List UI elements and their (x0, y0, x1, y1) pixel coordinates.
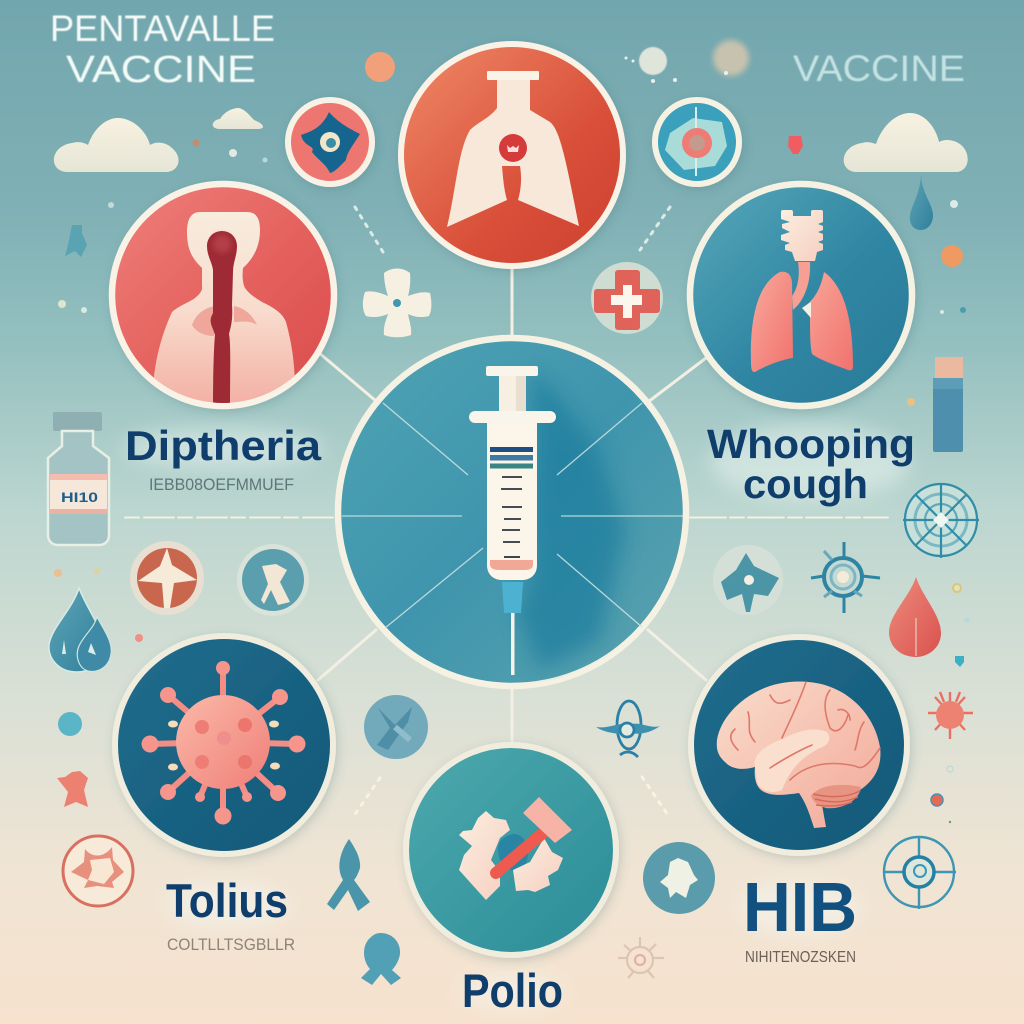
icon: small dots right (931, 766, 953, 823)
icon: teal ribbon badge (237, 544, 309, 616)
icon: syringe (469, 366, 556, 675)
icon: vial right (933, 357, 963, 452)
cloud right (844, 113, 968, 172)
icon: virus (142, 661, 306, 824)
icon: orange star badge (130, 541, 204, 615)
label: Diptheria: IEBB08OEFMMUEF (149, 475, 294, 494)
icon: red sun (928, 692, 973, 739)
panel: small red badge (288, 100, 372, 184)
icon: red cross badge (591, 262, 663, 334)
label halos (123, 424, 910, 1010)
panel: centre vaccine (338, 338, 686, 686)
icon: medical plus cream (363, 268, 431, 337)
dotted trails (353, 207, 670, 818)
panel: whooping cough (690, 184, 912, 406)
panel: tetanus (115, 636, 333, 854)
icon: orange ball (365, 52, 395, 82)
icon: trachea and lungs (751, 210, 853, 372)
label: Tolius (166, 874, 295, 954)
icon: lung flask (447, 71, 579, 227)
label: Polio: Polio (462, 964, 563, 1017)
icon: pale sun (618, 937, 664, 978)
panel: hib (691, 637, 907, 853)
title right: VACCINE (793, 48, 965, 89)
panel: small blue badge (655, 100, 739, 184)
title left: PENTAVALLE (50, 8, 275, 49)
icon: teal ribbon small (361, 933, 401, 985)
title left (50, 8, 275, 91)
label: Whooping cough: cough (743, 461, 868, 507)
icon: target wheel (883, 836, 956, 909)
icon: broken limb (459, 797, 572, 900)
label: Tolius: Tolius (166, 874, 288, 927)
cloud small (213, 108, 263, 129)
cloud left (54, 118, 179, 172)
icon: teal disc with star (643, 842, 715, 914)
icon: red ring badge (63, 836, 133, 906)
icon: orange flower (941, 245, 963, 267)
label: Diptheria (125, 422, 322, 494)
label: Diptheria: Diptheria (125, 422, 322, 469)
icon: red tag (788, 136, 803, 154)
icon: small scattered marks (54, 140, 970, 667)
icon: brain (717, 682, 880, 828)
icon: teal ribbon (327, 839, 370, 911)
icon: blue crossed badge (364, 695, 428, 759)
panel: top lungs (401, 44, 623, 266)
connector lines (125, 268, 888, 748)
label: Tolius: COLTLLTSGBLLR (167, 935, 295, 954)
icon: vial left (48, 412, 109, 545)
icon: vial left: HI10 (61, 489, 98, 505)
icon: radial germ (811, 542, 880, 613)
label: Whooping cough (707, 421, 915, 507)
panel: diphtheria (112, 184, 334, 410)
icon: flying emblem (596, 701, 660, 757)
spokes (342, 403, 683, 628)
icon: red drop (889, 577, 941, 657)
label: Whooping cough: Whooping (707, 421, 915, 467)
icon: throat (152, 212, 296, 410)
icon: red star (57, 771, 88, 807)
icon: double drop (49, 588, 111, 672)
label: HIB: HIB (743, 868, 857, 946)
icon: water drop under cloud (910, 175, 933, 230)
icon: faint spheres top right (624, 40, 749, 83)
panel: polio (406, 745, 616, 955)
label: HIB: NIHITENOZSKEN (745, 949, 856, 966)
icon: teal blob (58, 712, 82, 736)
icon: spider web target (903, 484, 979, 558)
icon: germ in pale badge (713, 545, 783, 615)
title left: VACCINE (66, 49, 256, 91)
